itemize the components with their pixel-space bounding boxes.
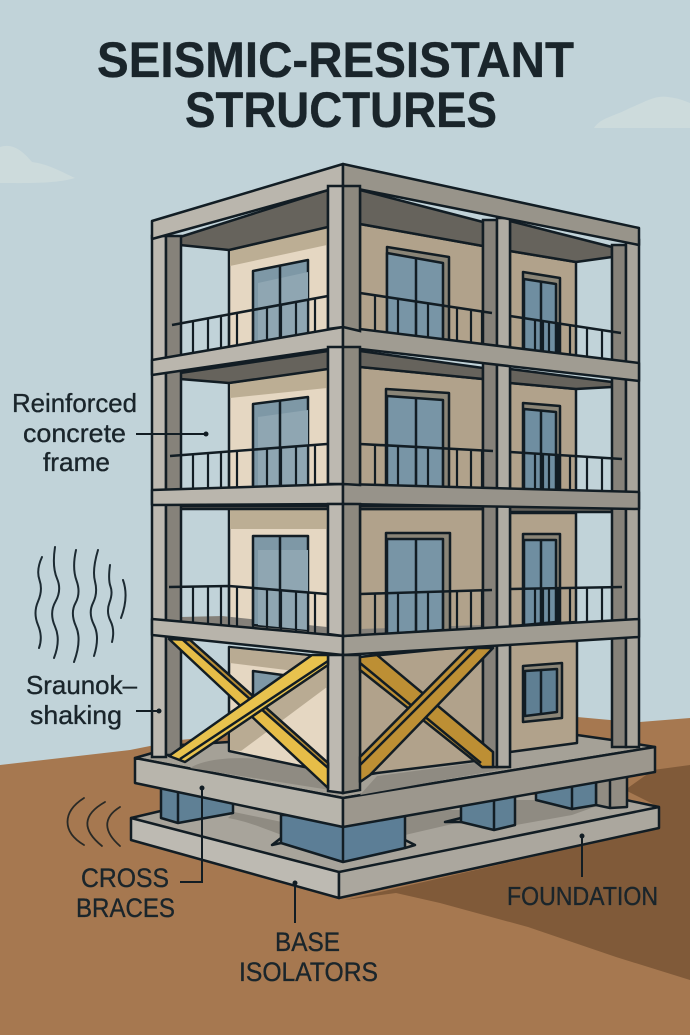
walls floor 3 [229, 509, 576, 636]
label: foundation: FOUNDATION [507, 881, 658, 911]
slab floor 4 [152, 619, 639, 655]
left column [152, 236, 181, 757]
window mid floor 3 [386, 533, 450, 634]
balusters floor 1 [192, 296, 604, 358]
isolator D [536, 775, 596, 809]
window right floor 3 [523, 534, 560, 625]
slab floor 2 [152, 327, 639, 381]
base slab [135, 735, 655, 827]
back post [596, 775, 627, 808]
label: base isolators: BASE [275, 927, 340, 957]
balusters floor 2 [192, 446, 604, 490]
window left floor 3 [253, 536, 308, 630]
label: cross braces [76, 786, 204, 923]
label: reinforced concrete frame: concrete [23, 418, 126, 448]
centre right column [483, 218, 510, 767]
dark ground shadow [345, 765, 690, 980]
balcony railings [169, 292, 622, 633]
cloud left [0, 146, 75, 183]
ground [0, 717, 690, 1035]
window mid floor 1 [387, 247, 449, 345]
walls floor 1 [229, 224, 576, 360]
ceilings [180, 190, 612, 512]
label: foundation [507, 834, 658, 911]
window left floor 4 [253, 671, 290, 702]
label: ground shaking: Sraunok– [26, 670, 138, 700]
title [97, 32, 574, 138]
label: cross braces: BRACES [76, 893, 175, 923]
cloud right [594, 97, 690, 128]
icon: seismic waves [36, 547, 126, 662]
balusters floor 3 [192, 587, 604, 633]
slab shadow [190, 758, 510, 795]
label: reinforced concrete frame [12, 388, 208, 477]
walls floor 2 [229, 367, 576, 492]
isolator C [445, 790, 515, 830]
label: ground shaking: shaking [30, 700, 122, 730]
roof slab [152, 164, 639, 245]
title: STRUCTURES [185, 82, 497, 138]
foundation slab [131, 795, 659, 898]
walls floor 4 [229, 641, 577, 776]
label: base isolators [239, 880, 378, 987]
left diagonal down [169, 639, 328, 788]
label: cross braces: CROSS [81, 863, 169, 893]
window right floor 2 [523, 403, 560, 490]
slab floor 3 [152, 484, 639, 509]
right diagonal up [360, 648, 493, 782]
side columns [152, 218, 639, 767]
floor slabs [152, 164, 639, 655]
title: SEISMIC-RESISTANT [97, 32, 574, 88]
label: ground shaking [26, 670, 162, 730]
label: reinforced concrete frame: Reinforced [12, 388, 137, 418]
window left floor 1 [253, 260, 308, 350]
window right floor 4 [523, 663, 562, 722]
window left floor 2 [253, 397, 308, 489]
window mid floor 2 [386, 389, 449, 488]
right diagonal down [360, 655, 493, 767]
foundation shadow [228, 800, 597, 835]
label: base isolators: ISOLATORS [239, 957, 378, 987]
icon: ground vibration arcs [68, 798, 120, 846]
centre corner column [328, 186, 360, 793]
label: reinforced concrete frame: frame [43, 447, 110, 477]
isolator B [272, 815, 415, 862]
cross braces [169, 639, 493, 788]
rails [169, 293, 622, 594]
floor 3 deck [181, 616, 483, 634]
window right floor 1 [523, 272, 560, 354]
left diagonal up [169, 655, 328, 762]
isolator A [161, 780, 233, 823]
base isolators [161, 775, 627, 862]
right column [612, 240, 639, 747]
walls and windows [180, 190, 612, 776]
